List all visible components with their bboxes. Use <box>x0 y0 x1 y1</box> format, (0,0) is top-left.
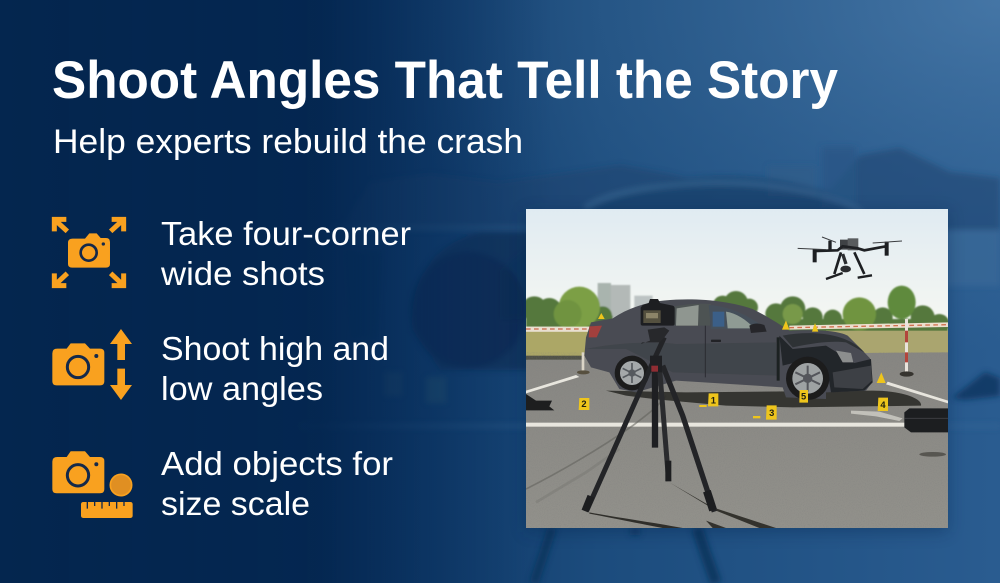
text: four-corner wide shots: Take four-corner <box>161 215 411 252</box>
tripod <box>582 327 776 528</box>
yellow evidence markers <box>579 313 888 420</box>
drone <box>798 237 902 279</box>
text: objects for size scale: size scale <box>161 485 310 522</box>
car wheels <box>615 356 649 390</box>
text: high and low angles: Shoot high and <box>161 330 389 367</box>
marker numbers: 2 <box>581 399 587 409</box>
text: four-corner wide shots: wide shots <box>160 255 325 292</box>
icon: camera with four corner arrows <box>54 219 124 286</box>
road <box>526 352 948 528</box>
asphalt cracks <box>526 402 660 490</box>
equipment case <box>904 408 948 432</box>
car shadow <box>606 391 921 407</box>
sky <box>526 209 948 332</box>
text: high and low angles <box>161 330 389 407</box>
photo: crash scene with tripod and drone <box>522 209 949 528</box>
marker numbers: 1 <box>711 395 716 405</box>
text: high and low angles: low angles <box>161 370 323 407</box>
grass <box>526 332 589 357</box>
road lines <box>526 375 948 427</box>
icon: camera with coin and ruler <box>52 451 133 518</box>
police tape <box>526 319 948 377</box>
marker numbers <box>582 393 886 416</box>
text: objects for size scale: Add objects for <box>161 445 393 482</box>
text: objects for size scale <box>161 445 393 522</box>
car <box>584 299 873 400</box>
icon: camera with up and down arrows <box>52 329 132 400</box>
marker numbers: 5 <box>801 391 806 401</box>
text: four-corner wide shots <box>160 215 411 292</box>
subtitle: Help experts rebuild the crash <box>53 123 523 161</box>
marker numbers: 3 <box>769 408 774 418</box>
photo shadow <box>526 212 948 532</box>
treeline and buildings <box>526 282 948 331</box>
title: Shoot Angles That Tell the Story <box>52 51 839 110</box>
camera on tripod <box>641 299 675 326</box>
marker numbers: 4 <box>880 400 886 410</box>
jack at left edge <box>526 394 554 410</box>
